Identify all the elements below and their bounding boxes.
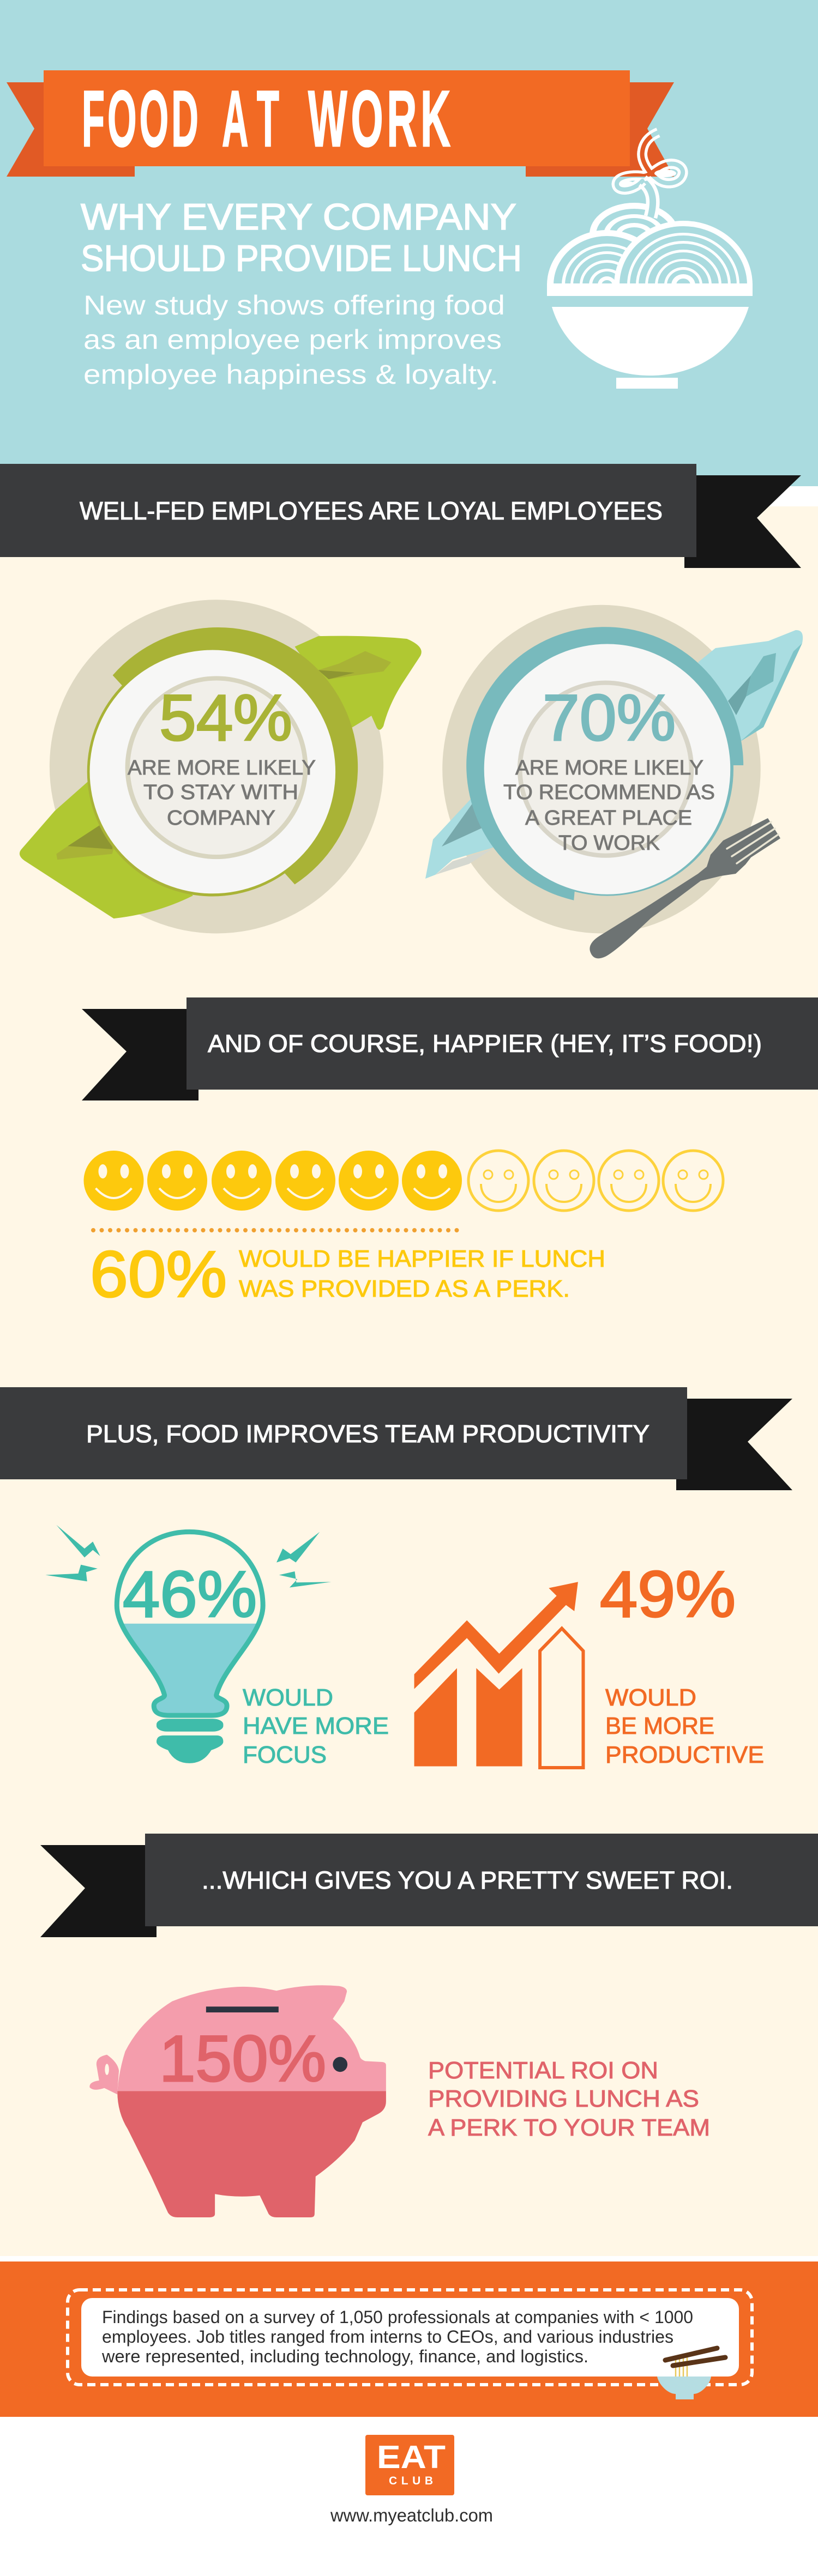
logo: eat club: EAT — [377, 2439, 446, 2475]
icons: smiley row — [84, 1151, 723, 1211]
text: methodology: Findings based on a survey of 1,050 professionals at companies with < 1000 — [102, 2307, 693, 2327]
napkin: green — [20, 636, 422, 918]
panel: findings footer — [0, 2261, 818, 2417]
heading: roi — [40, 1834, 818, 1937]
subtitle: WHY EVERY COMPANY — [81, 196, 516, 238]
label: recommend: A GREAT PLACE — [525, 807, 692, 830]
label: more productive: WOULD — [605, 1684, 696, 1711]
title: AT — [222, 75, 279, 164]
label: recommend — [503, 757, 715, 855]
title — [82, 74, 450, 164]
title: FOOD — [82, 75, 199, 164]
label: more focus: FOCUS — [243, 1741, 327, 1768]
label: potential roi — [428, 2057, 710, 2141]
inner plate — [125, 676, 308, 859]
label: stay with company: TO STAY WITH — [143, 781, 298, 804]
panel: focus — [45, 1525, 389, 1768]
label: recommend: TO RECOMMEND AS — [503, 781, 715, 804]
label: more productive: BE MORE — [605, 1713, 714, 1739]
heading: loyal employees — [0, 464, 801, 568]
panel: 54% plate — [20, 600, 422, 933]
stat: 60%: 60% — [90, 1238, 227, 1311]
label: stay with company: COMPANY — [167, 807, 275, 830]
text: methodology: were represented, including technology, finance, and logistics. — [101, 2347, 588, 2366]
stat: 70%: 70% — [543, 681, 676, 754]
intro text: as an employee perk improves — [83, 324, 502, 355]
text: methodology — [101, 2307, 693, 2366]
intro text — [83, 290, 505, 390]
label: potential roi: POTENTIAL ROI ON — [428, 2057, 658, 2084]
napkin: blue — [425, 630, 803, 879]
label: stay with company — [128, 757, 316, 830]
label: happier if lunch — [239, 1245, 605, 1302]
logo: eat club: CLUB — [389, 2475, 433, 2487]
label: potential roi: PROVIDING LUNCH AS — [428, 2085, 699, 2112]
stat: 150%: 150% — [159, 2022, 326, 2095]
label: stay with company: ARE MORE LIKELY — [128, 757, 316, 779]
heading: happier: AND OF COURSE, HAPPIER (HEY, IT’S FOOD!) — [208, 1030, 762, 1057]
panel: productive — [414, 1558, 764, 1768]
label: more focus: HAVE MORE — [243, 1713, 389, 1739]
stat: 46%: 46% — [123, 1558, 257, 1631]
panel: roi — [89, 1985, 710, 2217]
label: happier if lunch: WOULD BE HAPPIER IF LUNCH — [239, 1245, 605, 1272]
label: recommend: TO WORK — [558, 832, 660, 855]
chart: rising bars and arrow — [414, 1582, 583, 1768]
heading: loyal employees: WELL-FED EMPLOYEES ARE LOYAL EMPLOYEES — [80, 497, 663, 525]
heading: roi: ...WHICH GIVES YOU A PRETTY SWEET ROI. — [202, 1866, 733, 1894]
heading: happier — [82, 997, 818, 1100]
stat: 54%: 54% — [159, 681, 292, 754]
label: recommend: ARE MORE LIKELY — [515, 757, 703, 779]
inner plate — [518, 680, 694, 858]
subtitle: SHOULD PROVIDE LUNCH — [81, 238, 522, 279]
title ribbon — [7, 70, 674, 177]
stat: 49%: 49% — [600, 1558, 736, 1631]
plate ring: green — [87, 627, 358, 897]
label: more productive: PRODUCTIVE — [605, 1741, 764, 1768]
heading: productivity — [0, 1387, 792, 1490]
label: happier if lunch: WAS PROVIDED AS A PERK. — [239, 1275, 570, 1302]
icon: fork — [590, 818, 780, 958]
intro text: employee happiness & loyalty. — [83, 359, 498, 390]
icon: light bulb — [117, 1532, 263, 1763]
panel: happiness — [84, 1151, 723, 1311]
subtitle — [81, 196, 522, 279]
icon: small noodle bowl — [657, 2348, 725, 2399]
icon: sparks — [45, 1525, 331, 1587]
website url: www.myeatclub.com — [330, 2505, 493, 2525]
title: WORK — [308, 74, 450, 163]
label: potential roi: A PERK TO YOUR TEAM — [428, 2114, 710, 2141]
label: more productive — [605, 1684, 764, 1768]
text: methodology: employees. Job titles ranged from interns to CEOs, and various industries — [102, 2327, 673, 2347]
label: more focus: WOULD — [243, 1684, 333, 1711]
heading: productivity: PLUS, FOOD IMPROVES TEAM PRODUCTIVITY — [86, 1420, 649, 1448]
intro text: New study shows offering food — [83, 290, 505, 321]
panel: 70% plate — [425, 605, 803, 958]
icon: noodle bowl — [547, 132, 753, 389]
logo: eat club — [365, 2435, 454, 2495]
panel: header — [7, 70, 753, 390]
icon: piggy bank — [89, 1985, 386, 2217]
label: more focus — [243, 1684, 389, 1768]
plate ring: blue — [466, 627, 743, 900]
